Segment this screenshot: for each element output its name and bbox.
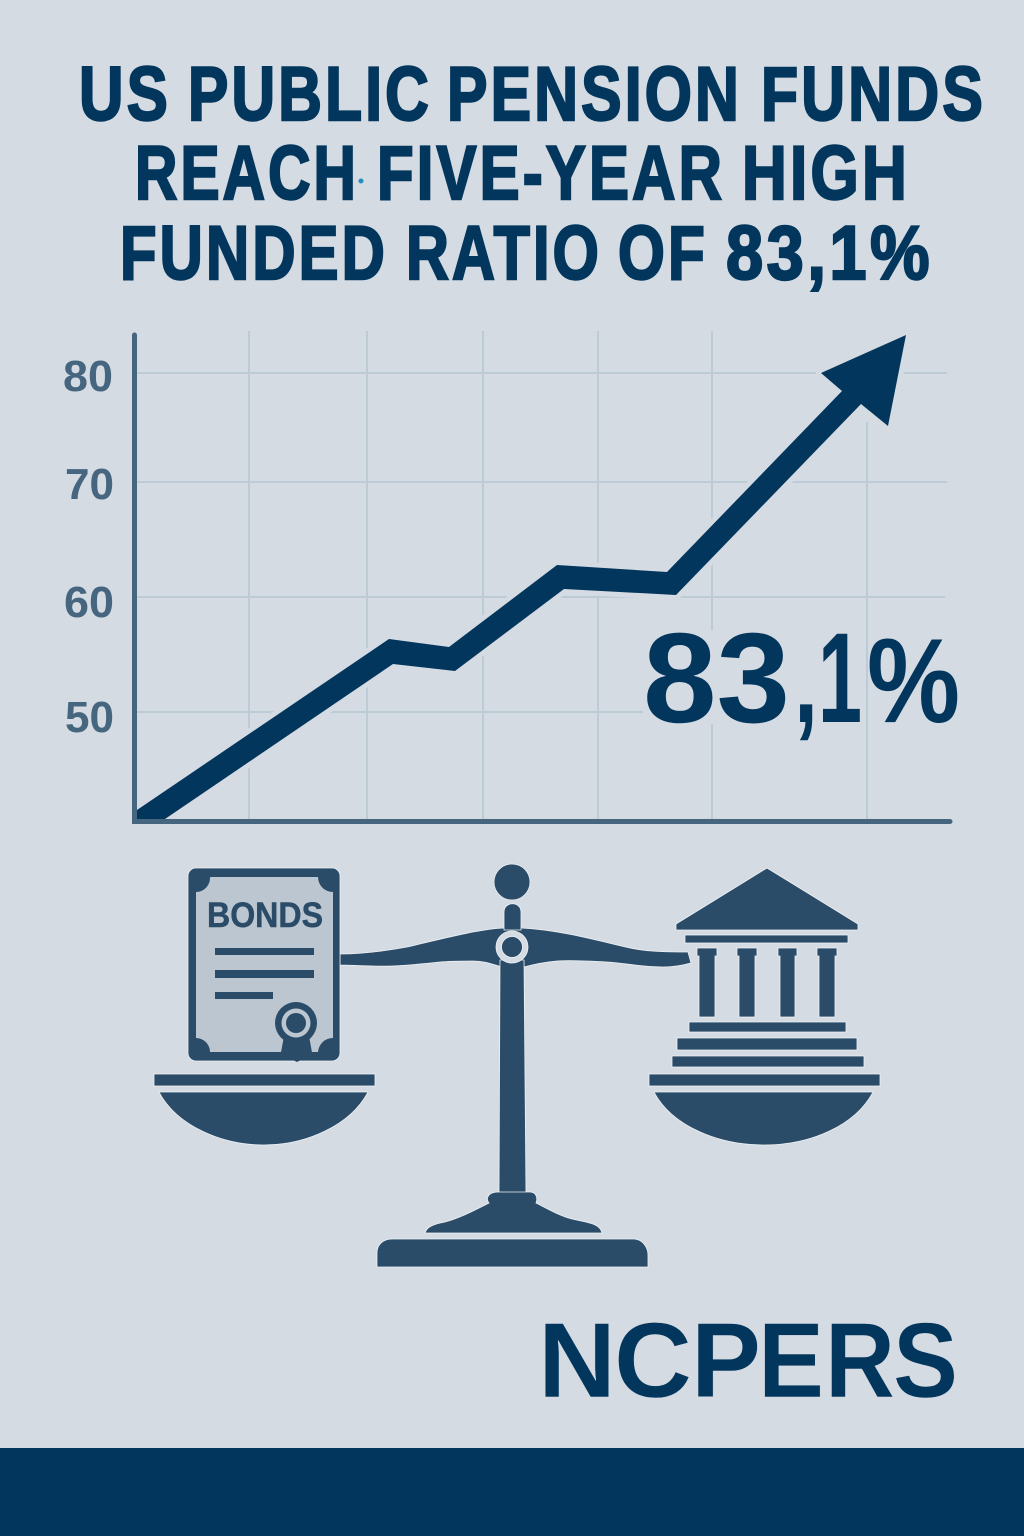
scale beam [340, 928, 691, 967]
callout: 83,1%: 83 [643, 607, 790, 750]
icon: bank building [672, 868, 864, 1067]
title: REACH [135, 131, 359, 216]
title: PUBLIC [188, 52, 432, 137]
logo text: NCPERS: P [691, 1300, 761, 1420]
title: FIVE-YEAR [377, 131, 725, 216]
certificate seal [275, 1002, 317, 1062]
callout: 83,1%: % [867, 614, 960, 748]
bank steps [672, 1022, 864, 1067]
left tray [154, 1074, 375, 1086]
title: 83,1% [726, 211, 933, 296]
chart axes [134, 335, 950, 822]
title: PENSION [447, 52, 742, 137]
callout: 83,1% [643, 607, 960, 750]
trend line with arrowhead [137, 335, 906, 819]
y-axis labels: 60 [64, 578, 114, 627]
right tray [649, 1074, 880, 1086]
callout: 83,1%: , [794, 616, 818, 748]
footer band [0, 1448, 1024, 1536]
logo text: NCPERS: R [825, 1300, 895, 1420]
y-axis labels: 70 [65, 460, 114, 509]
bank entablature [685, 935, 848, 943]
title: HIGH [742, 131, 910, 216]
logo text: NCPERS [538, 1300, 958, 1420]
logo text: NCPERS: C [614, 1300, 692, 1420]
left bowl [159, 1092, 368, 1145]
bank roof [676, 868, 858, 930]
right bowl [654, 1092, 873, 1145]
icon: balance scale [154, 864, 880, 1267]
logo text: NCPERS: N [538, 1300, 616, 1420]
callout: 83,1%: 1 [818, 607, 862, 750]
bonds label: BONDS [207, 896, 323, 935]
title: OF [618, 211, 708, 296]
icon: bonds certificate [188, 868, 340, 1062]
title: RATIO [406, 211, 602, 296]
scale top ball [494, 864, 530, 900]
logo text: NCPERS: S [893, 1300, 958, 1420]
scale base [377, 1239, 648, 1267]
title: FUNDED [120, 211, 388, 296]
scale foot [425, 1192, 602, 1233]
scale pole [499, 960, 526, 1195]
title: US [79, 52, 171, 137]
title [79, 52, 986, 296]
scale pivot ring [496, 931, 528, 963]
logo text: NCPERS: E [758, 1300, 824, 1420]
title accent dot [358, 178, 364, 184]
y-axis labels: 80 [63, 352, 113, 401]
y-axis labels: 50 [65, 693, 114, 742]
line chart [63, 331, 950, 822]
scale post top [504, 904, 521, 930]
document text lines [215, 948, 314, 999]
y-axis labels [63, 352, 114, 742]
bank columns [697, 948, 837, 1017]
